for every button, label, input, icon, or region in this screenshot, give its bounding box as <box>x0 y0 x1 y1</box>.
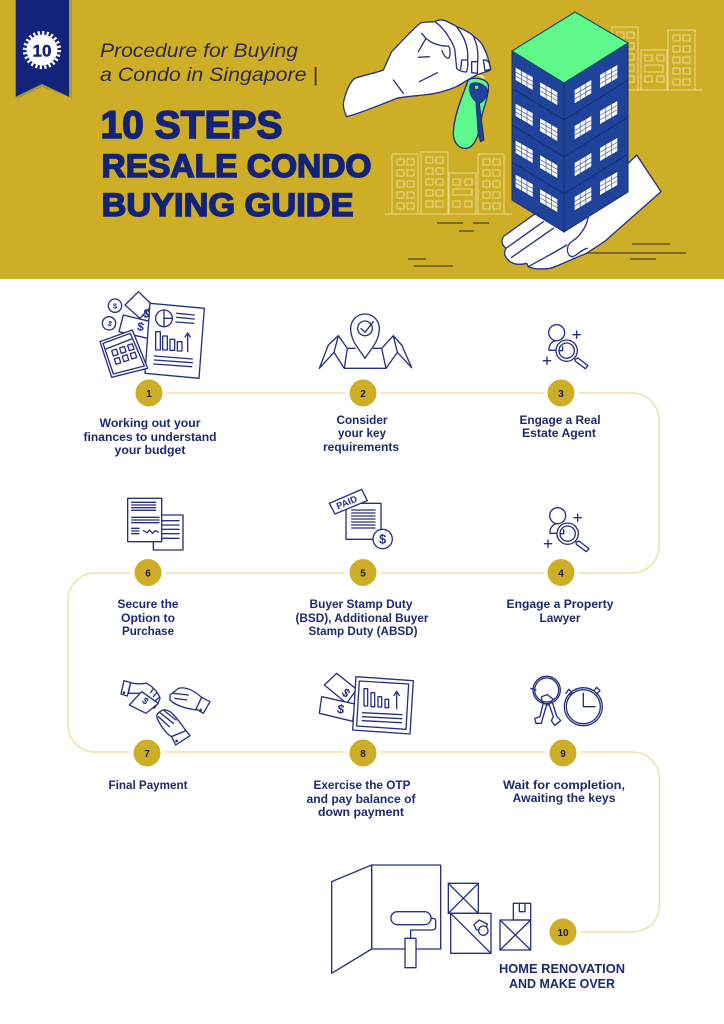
step 2 <box>319 314 412 454</box>
step 7 <box>108 681 210 792</box>
icon: apartment building <box>512 12 628 232</box>
step 8 label: Exercise the OTP <box>314 780 411 792</box>
subtitle: Procedure for Buying <box>100 41 298 62</box>
step 3 label: Estate Agent <box>522 428 596 440</box>
step 5 label: (BSD), Additional Buyer <box>296 613 429 625</box>
number 4 <box>546 557 576 588</box>
step 5 label: Buyer Stamp Duty <box>310 599 413 611</box>
step 1 label <box>84 418 216 457</box>
step 6 label: Purchase <box>122 626 174 638</box>
step 6 <box>118 498 183 638</box>
step 2 label: Consider <box>336 415 388 427</box>
step 10: 10 <box>557 928 569 939</box>
step 5 label <box>296 599 429 638</box>
step 6 label: Secure the <box>118 599 178 611</box>
step 7: 7 <box>144 749 150 760</box>
key fob <box>453 75 488 148</box>
step 6 label <box>118 599 178 638</box>
number 1 <box>134 378 164 408</box>
step 10 <box>332 865 625 991</box>
step 8 label <box>306 780 416 819</box>
step 9 label <box>503 780 625 805</box>
number 6 <box>132 557 164 588</box>
icon: person search <box>543 325 588 369</box>
step 4 label: Engage a Property <box>506 599 614 611</box>
step 10 label <box>499 962 625 991</box>
icon: hands exchanging money: $ <box>140 696 151 707</box>
step 9 label: Wait for completion, <box>503 780 625 792</box>
step 9 <box>503 676 625 805</box>
step 4: 4 <box>558 568 564 580</box>
step 3 label: Engage a Real <box>520 415 600 427</box>
step 10 label: HOME RENOVATION <box>499 962 625 976</box>
icon: finances <box>100 292 204 378</box>
step 1 label: Working out your <box>100 418 201 430</box>
icon: paid document: PAID <box>335 494 359 511</box>
ribbon badge: 10 <box>33 42 51 60</box>
number 10 <box>548 916 578 948</box>
step 9: 9 <box>560 749 566 760</box>
number 5 <box>348 557 378 588</box>
icon: hand holding keys <box>343 20 491 148</box>
step 2 label: your key <box>338 428 387 440</box>
step 7 label: Final Payment <box>108 780 188 792</box>
step 5: 5 <box>360 568 366 580</box>
number 3 <box>546 378 576 408</box>
ground dashes <box>408 223 686 266</box>
step 5 label: Stamp Duty (ABSD) <box>308 626 418 638</box>
icon: paid document <box>329 489 392 549</box>
icon: tablet chart with bills: $ <box>336 702 345 717</box>
icon: map pin <box>319 314 412 368</box>
step 8 label: and pay balance of <box>306 794 416 806</box>
step 1 label: your budget <box>114 445 186 457</box>
step 2 label <box>323 415 399 454</box>
icon: paid document: $ <box>379 532 386 546</box>
connector line <box>68 393 660 932</box>
icon: option documents <box>128 498 183 550</box>
icon: tablet chart with bills: $ <box>339 685 353 701</box>
step 3 <box>520 325 600 440</box>
step 2 label: requirements <box>323 442 399 454</box>
number 2 <box>348 378 378 408</box>
skyline: right <box>612 27 703 90</box>
subtitle <box>100 41 318 86</box>
step 4 label: Lawyer <box>540 613 581 625</box>
icon: finances: $ <box>106 319 113 329</box>
title <box>100 104 372 223</box>
title: 10 STEPS <box>100 104 282 147</box>
step 6: 6 <box>145 568 151 580</box>
number 9 <box>548 738 578 768</box>
header band <box>0 0 724 279</box>
icon: finances: $ <box>141 306 152 321</box>
icon: finances: $ <box>136 319 145 334</box>
title: RESALE CONDO <box>102 148 372 184</box>
step 4 label <box>506 599 614 625</box>
icon: tablet chart with bills <box>319 673 413 734</box>
skyline: left <box>385 152 512 214</box>
step 5 <box>296 489 429 638</box>
step 1: 1 <box>146 389 152 400</box>
icon: person search <box>544 508 589 552</box>
step 9 label: Awaiting the keys <box>512 793 616 805</box>
title: BUYING GUIDE <box>102 187 354 223</box>
step 4 <box>506 508 614 625</box>
step 3 label <box>520 415 600 440</box>
ribbon badge <box>16 0 72 99</box>
step 2: 2 <box>360 389 366 400</box>
number 8 <box>348 738 378 768</box>
step 8 <box>306 673 416 819</box>
step 8 label: down payment <box>318 807 404 819</box>
step 10 label: AND MAKE OVER <box>509 977 615 991</box>
step 1 <box>84 292 216 457</box>
step 3: 3 <box>558 389 564 400</box>
icon: renovation wall, roller and boxes <box>332 865 531 973</box>
icon: keys and stopwatch <box>531 676 602 726</box>
icon: hand under building <box>502 155 661 269</box>
step 6 label: Option to <box>121 613 175 625</box>
number 7 <box>132 738 162 768</box>
step 8: 8 <box>360 749 366 760</box>
icon: finances: $ <box>113 301 117 310</box>
subtitle: a Condo in Singapore | <box>100 65 318 86</box>
step 1 label: finances to understand <box>84 432 216 444</box>
